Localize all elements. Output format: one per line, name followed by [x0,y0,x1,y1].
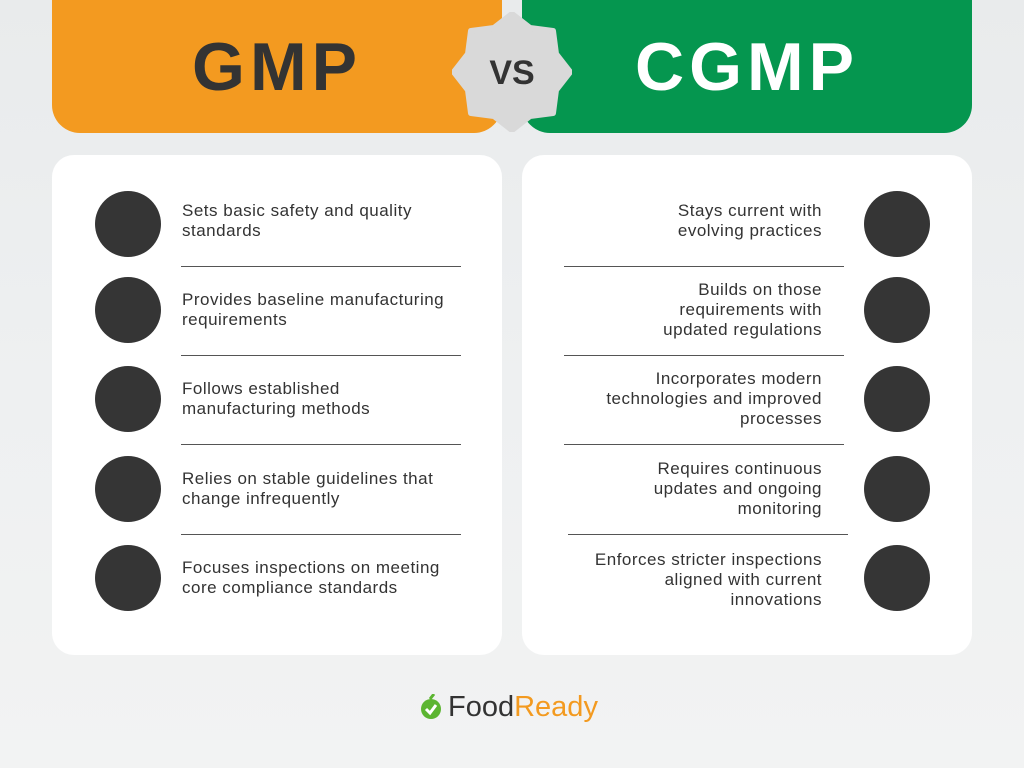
text 5: Enforces stricter inspections [595,550,822,569]
header: CGMP [522,0,972,133]
text 5: aligned with current [665,570,822,589]
text 3: technologies and improved [606,389,822,408]
text 3: Incorporates modern [656,369,822,388]
text 1: standards [182,221,261,240]
header: GMP [52,0,502,133]
text 2: Provides baseline manufacturing [182,290,444,309]
icon: checklist [864,456,930,522]
text 3 [606,369,822,428]
text 5: innovations [730,590,822,609]
text 5: core compliance standards [182,578,398,597]
panel: GMP [52,155,502,655]
text 1 [678,201,822,240]
logo: FoodReady [421,690,598,722]
text 4 [182,469,433,508]
icon: magnifier [95,191,161,257]
text 3: manufacturing methods [182,399,370,418]
text 1: Stays current with [678,201,822,220]
text 4: Relies on stable guidelines that [182,469,433,488]
text 4: updates and ongoing [654,479,822,498]
text 3: Follows established [182,379,340,398]
text 4: Requires continuous [658,459,822,478]
text 3: processes [740,409,822,428]
text 2: Builds on those [698,280,822,299]
badge: VS: VS [489,54,535,92]
panel: CGMP [522,155,972,655]
text 2 [182,290,444,329]
icon: regulations [864,277,930,343]
text 1: evolving practices [678,221,822,240]
text 4 [654,459,822,518]
icon: gear [95,366,161,432]
text 5 [182,558,440,597]
icon: target [864,191,930,257]
header: GMP: GMP [192,28,362,104]
icon: inspection [864,545,930,611]
logo: FoodReady: Ready [514,690,598,722]
icon: technology [864,366,930,432]
text 2: requirements with [679,300,822,319]
icon: inspector [95,545,161,611]
text 3 [182,379,370,418]
text 4: change infrequently [182,489,340,508]
text 1 [182,201,412,240]
text 5 [595,550,822,609]
text 4: monitoring [738,499,822,518]
logo: FoodReady: Food [448,690,514,722]
header: CGMP: CGMP [635,28,859,104]
icon: document [95,277,161,343]
text 1: Sets basic safety and quality [182,201,412,220]
badge: VS [452,12,572,132]
text 2: updated regulations [663,320,822,339]
text 2: requirements [182,310,287,329]
text 5: Focuses inspections on meeting [182,558,440,577]
text 2 [663,280,822,339]
icon: guidelines [95,456,161,522]
